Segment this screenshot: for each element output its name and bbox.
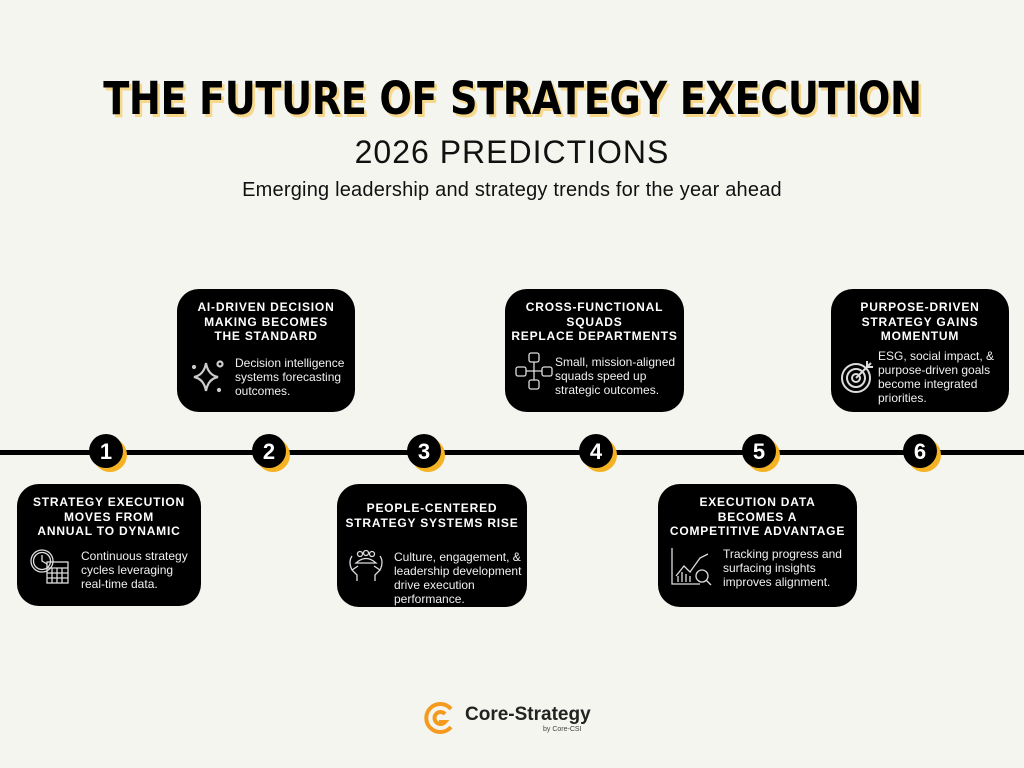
panel 4 [505,289,684,412]
heading 1: ANNUAL TO DYNAMIC [37,524,181,538]
panel 1 [17,484,201,606]
panel 5 [658,484,857,607]
panel 2 [177,289,355,412]
heading 1 [33,495,185,538]
logo text: Core-Strategy [465,704,591,725]
text 6: ESG, social impact, & purpose-driven goals become integrated priorities. [878,349,994,405]
panel 6 [831,289,1009,412]
heading 2: THE STANDARD [214,329,318,343]
heading 2 [197,300,335,343]
heading 3: STRATEGY SYSTEMS RISE [345,516,519,530]
heading 1: STRATEGY EXECUTION [33,495,185,509]
panel 3 [337,484,527,607]
heading 6: PURPOSE-DRIVEN [860,300,980,314]
text 3: Culture, engagement, & leadership development drive execution performance. [394,550,521,606]
heading 5 [670,495,845,538]
icon: sparkle [192,360,224,392]
tagline: Emerging leadership and strategy trends for the year ahead [242,179,782,201]
heading 3 [345,501,519,530]
heading 6: MOMENTUM [881,329,959,343]
timeline line [0,450,1024,455]
marker 4 [579,434,617,472]
text 5: Tracking progress and surfacing insights improves alignment. [723,547,842,589]
subtitle: 2026 PREDICTIONS [355,134,669,170]
marker 5 [742,434,780,472]
text 4: Small, mission-aligned squads speed up strategic outcomes. [555,355,675,397]
heading 4: REPLACE DEPARTMENTS [511,329,678,343]
icon: logo mark [424,702,452,734]
text 1: Continuous strategy cycles leveraging real-time data. [81,549,188,591]
heading 2: MAKING BECOMES [204,314,328,328]
marker 6 [903,434,941,472]
icon: target [841,361,873,393]
heading 1: MOVES FROM [64,510,154,524]
heading 6 [860,300,980,343]
icon: chart magnifier [671,548,712,586]
icon: clock calendar [30,549,69,584]
text 2: Decision intelligence systems forecasting outcomes. [235,356,344,398]
heading 4: SQUADS [566,314,623,328]
heading 4 [511,300,678,343]
icon: network [515,352,553,390]
heading 5: EXECUTION DATA [699,495,816,509]
heading 5: COMPETITIVE ADVANTAGE [670,524,845,538]
marker 3: 3 [418,439,430,464]
marker 2: 2 [263,439,275,464]
heading 4: CROSS-FUNCTIONAL [526,300,663,314]
logo [424,702,591,734]
heading 6: STRATEGY GAINS [862,314,978,328]
marker 1 [89,434,127,472]
marker 2 [252,434,290,472]
heading 5: BECOMES A [718,510,797,524]
marker 4: 4 [590,439,603,464]
marker 5: 5 [753,439,765,464]
title: THE FUTURE OF STRATEGY EXECUTION [103,72,921,125]
marker 3 [407,434,445,472]
marker 1: 1 [100,439,112,464]
icon: hands with people [349,550,383,581]
heading 2: AI-DRIVEN DECISION [197,300,335,314]
marker 6: 6 [914,439,926,464]
heading 3: PEOPLE-CENTERED [367,501,497,515]
logo byline: by Core-CSI [543,726,582,733]
